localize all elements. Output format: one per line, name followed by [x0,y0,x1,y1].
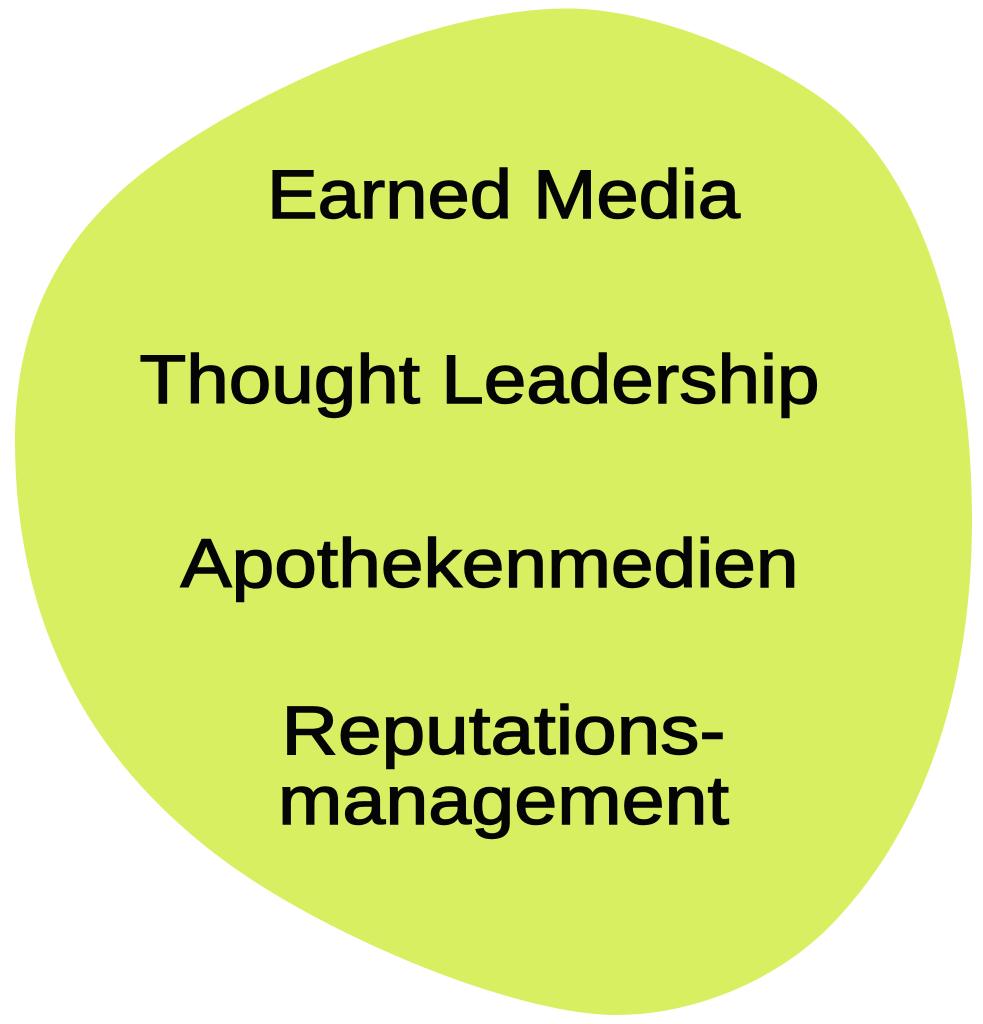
label: Thought Leadership: Thought Leadership [140,341,820,418]
label: Earned Media: Earned Media [267,156,741,233]
label: Reputationsmanagement: management [278,762,729,839]
label: Reputationsmanagement: Reputations- [282,692,726,769]
label: Reputationsmanagement [278,692,729,839]
label: Apothekenmedien: Apothekenmedien [180,525,798,602]
